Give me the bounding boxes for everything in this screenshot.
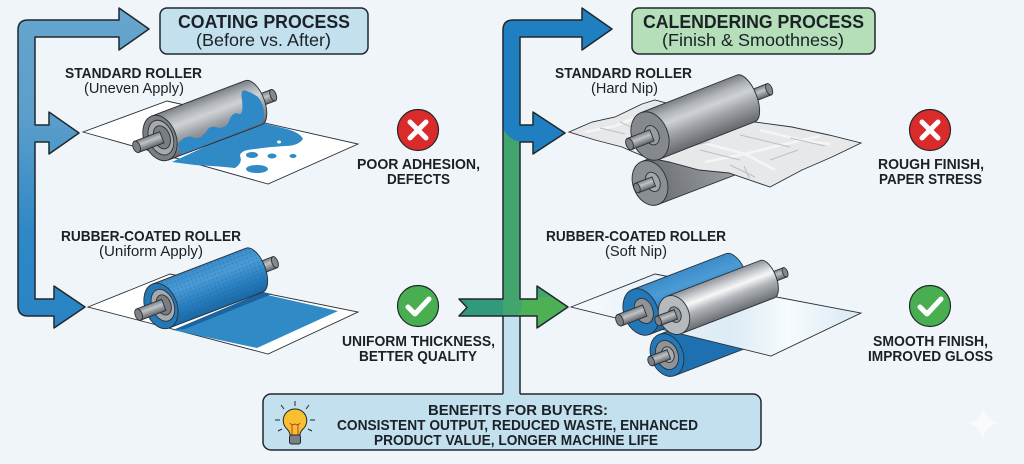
benefits text: [337, 417, 698, 449]
illustration: rubber roller uniform coating: [88, 239, 358, 354]
panel: coating title: [160, 8, 368, 54]
outcome: smooth finish: IMPROVED GLOSS: [868, 348, 993, 365]
outcome: poor adhesion: [357, 156, 480, 188]
benefits heading: BENEFITS FOR BUYERS:: [428, 402, 608, 419]
panel: coating title: (Before vs. After): [196, 30, 331, 50]
outcome: smooth finish: SMOOTH FINISH,: [873, 333, 988, 350]
outcome: rough finish: PAPER STRESS: [879, 171, 982, 188]
label: rubber roller calendering: RUBBER-COATED ROLLER: [546, 228, 726, 245]
outcome: rough finish: ROUGH FINISH,: [878, 156, 984, 173]
label: rubber roller coating: [61, 228, 241, 260]
benefits text: CONSISTENT OUTPUT, REDUCED WASTE, ENHANCED: [337, 417, 698, 434]
sparkle watermark: [966, 406, 1000, 441]
illustration: standard roller uneven coating: [83, 72, 358, 184]
illustration: rubber rollers soft nip: [571, 249, 861, 383]
label: standard roller calendering: STANDARD ROLLER: [555, 65, 692, 82]
panel: calendering title: CALENDERING PROCESS: [643, 12, 864, 32]
benefits panel: [263, 394, 761, 450]
label: rubber roller calendering: (Soft Nip): [605, 243, 667, 260]
label: standard roller coating: (Uneven Apply): [84, 80, 184, 97]
label: standard roller calendering: [555, 65, 692, 97]
outcome: rough finish: [878, 156, 984, 188]
icon: red cross calendering: [910, 110, 950, 150]
panel: calendering title: [632, 8, 875, 54]
left flow arrow: [18, 8, 149, 328]
middle flow arrow: [458, 7, 613, 329]
outcome: poor adhesion: POOR ADHESION,: [357, 156, 480, 173]
benefits text: PRODUCT VALUE, LONGER MACHINE LIFE: [374, 432, 658, 449]
outcome: uniform thickness: UNIFORM THICKNESS,: [342, 333, 495, 350]
outcome: smooth finish: [868, 333, 993, 365]
panel: coating title: COATING PROCESS: [178, 12, 350, 32]
label: rubber roller coating: RUBBER-COATED ROLLER: [61, 228, 241, 245]
panel: calendering title: (Finish & Smoothness): [662, 30, 844, 50]
icon: green check coating: [398, 286, 438, 326]
outcome: poor adhesion: DEFECTS: [387, 171, 450, 188]
connector stem to benefits: [503, 314, 520, 396]
outcome: uniform thickness: BETTER QUALITY: [359, 348, 477, 365]
label: standard roller calendering: (Hard Nip): [591, 80, 658, 97]
icon: red cross coating: [398, 110, 438, 150]
icon: light bulb: [275, 401, 315, 444]
icon: green check calendering: [910, 286, 950, 326]
label: standard roller coating: STANDARD ROLLER: [65, 65, 202, 82]
label: rubber roller calendering: [546, 228, 726, 260]
label: rubber roller coating: (Uniform Apply): [99, 243, 203, 260]
illustration: standard rollers hard nip: [569, 65, 861, 211]
label: standard roller coating: [65, 65, 202, 97]
outcome: uniform thickness: [342, 333, 495, 365]
